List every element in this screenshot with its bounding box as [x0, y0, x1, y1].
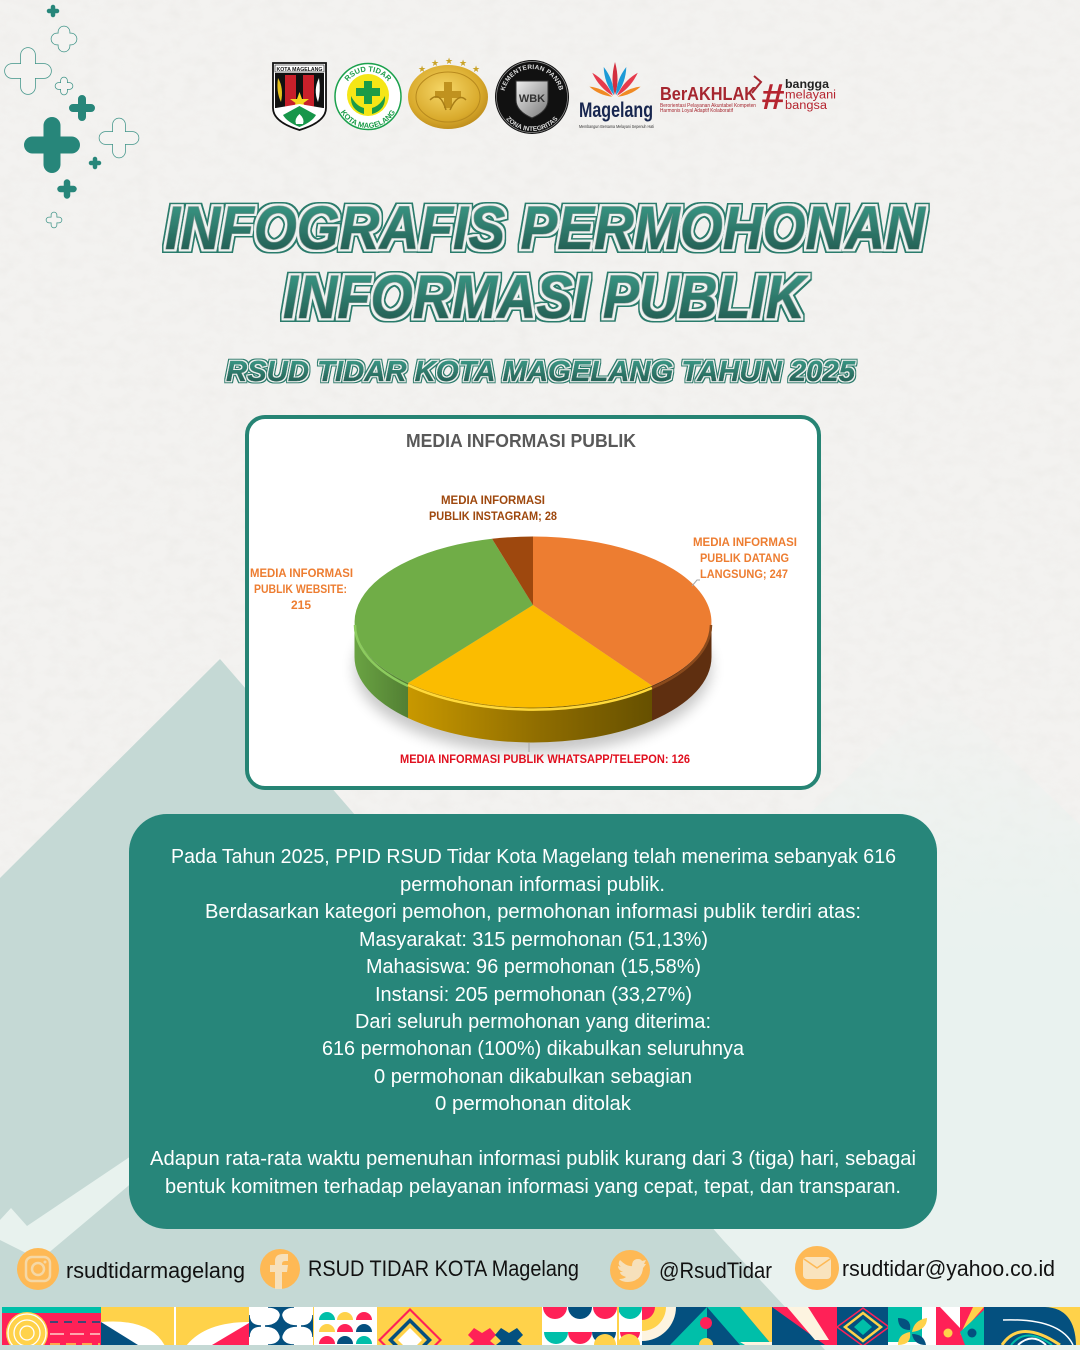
logo: BerAKHLAK: Berorientasi Pelayanan Akuntabel Kompeten [660, 103, 756, 109]
decorative batik strip [2, 1307, 1080, 1345]
summary paragraph: Dari seluruh permohonan yang diterima: [355, 1010, 711, 1033]
label: website [250, 568, 353, 612]
logo: BerAKHLAK [660, 76, 761, 114]
tile 12 [936, 1307, 984, 1345]
icon: facebook [260, 1249, 300, 1289]
footer contacts [17, 1246, 1055, 1290]
label: datang langsung: LANGSUNG; 247 [700, 569, 788, 581]
label: website: PUBLIK WEBSITE: [254, 584, 347, 596]
tile 13 [984, 1307, 1080, 1345]
logo: BerAKHLAK: Harmonis Loyal Adaptif Kolaboratif [660, 108, 734, 114]
title: INFORMASI PUBLIK [283, 263, 809, 331]
logo: WBK zona integritas: KEMENTERIAN PANRB [500, 64, 564, 91]
label: website: MEDIA INFORMASI [250, 568, 353, 580]
logo: bangga melayani bangsa: # [761, 76, 784, 117]
summary paragraph: 0 permohonan dikabulkan sebagian [374, 1065, 692, 1088]
subtitle: RSUD TIDAR KOTA MAGELANG TAHUN 2025 [226, 356, 856, 388]
logo: gold medal: ★ [445, 56, 453, 66]
tile 10 [837, 1307, 888, 1345]
title: INFOGRAFIS PERMOHONAN [165, 194, 927, 262]
logo: gold medal: ★ [431, 58, 439, 68]
logo: bangga melayani bangsa: melayani [785, 90, 836, 102]
background: pale mountain [560, 690, 1080, 1350]
tile 8 [642, 1307, 772, 1345]
logo: Kota Magelang brand: Magelang [579, 99, 653, 122]
logo row [272, 56, 836, 134]
facebook name: RSUD TIDAR KOTA Magelang [308, 1256, 579, 1281]
summary paragraph: Masyarakat: 315 permohonan (51,13%) [359, 928, 708, 951]
twitter handle: @RsudTidar [659, 1258, 772, 1283]
summary paragraph: Berdasarkan kategori pemohon, permohonan informasi publik terdiri atas: [205, 900, 861, 923]
logo: WBK zona integritas: ZONA INTEGRITAS [506, 116, 558, 131]
panel: pie chart [247, 417, 819, 788]
tile 11 [888, 1307, 922, 1342]
panel: summary text [129, 814, 937, 1229]
logo: gold medal: ★ [472, 64, 480, 74]
summary paragraph [150, 845, 916, 1198]
label: Instagram: MEDIA INFORMASI [441, 495, 545, 507]
label: datang langsung [693, 537, 797, 581]
title [165, 194, 927, 331]
logo: bangga melayani bangsa: bangga [785, 79, 830, 91]
label: website: 215 [291, 600, 312, 612]
tile 1 [2, 1307, 101, 1313]
icon group: decorative plus signs [12, 7, 132, 225]
logo: Kota Magelang brand: Membangun Bersama Melayani Sepenuh Hati [579, 124, 654, 129]
icon: twitter [610, 1250, 650, 1290]
instagram handle: rsudtidarmagelang [66, 1258, 245, 1283]
summary paragraph: Adapun rata-rata waktu pemenuhan informasi publik kurang dari 3 (tiga) hari, sebagai [150, 1147, 916, 1170]
logo: WBK zona integritas: WBK [519, 93, 545, 105]
chart title: MEDIA INFORMASI PUBLIK [406, 431, 636, 451]
logo: RSUD Tidar: KOTA MAGELANG [340, 110, 395, 128]
3D pie chart [354, 536, 712, 753]
tile 2 [101, 1322, 165, 1346]
label: datang langsung: PUBLIK DATANG [700, 553, 789, 565]
logo: BerAKHLAK: BerAKHLAK [660, 83, 757, 104]
logo: gold medal: ★ [418, 64, 426, 74]
label: Instagram [429, 495, 558, 523]
tile 4 [249, 1307, 313, 1345]
logo: bangga melayani bangsa [761, 76, 836, 117]
summary paragraph: Instansi: 205 permohonan (33,27%) [375, 983, 692, 1006]
label: datang langsung: MEDIA INFORMASI [693, 537, 797, 549]
summary paragraph: 616 permohonan (100%) dikabulkan seluruhnya [322, 1037, 745, 1060]
logo: Kota Magelang crest: KOTA MAGELANG [276, 67, 322, 73]
label: whatsapp: MEDIA INFORMASI PUBLIK WHATSAPP/TELEPON: 126 [400, 754, 690, 766]
logo: WBK zona integritas [495, 60, 569, 134]
summary paragraph: 0 permohonan ditolak [435, 1092, 632, 1115]
logo: Kota Magelang crest [273, 63, 326, 130]
logo: RSUD Tidar: RSUD TIDAR [344, 66, 392, 82]
label: Instagram: PUBLIK INSTAGRAM; 28 [429, 511, 558, 523]
summary paragraph: Pada Tahun 2025, PPID RSUD Tidar Kota Magelang telah menerima sebanyak 616 [171, 845, 896, 868]
logo: bangga melayani bangsa: bangsa [785, 100, 828, 112]
email address: rsudtidar@yahoo.co.id [842, 1256, 1055, 1281]
icon: email [795, 1246, 839, 1290]
summary paragraph: bentuk komitmen terhadap pelayanan informasi yang cepat, tepat, dan transparan. [165, 1175, 901, 1198]
tile 5 [314, 1307, 377, 1345]
tile 3 [186, 1322, 249, 1346]
background: sage mountain [0, 659, 825, 1350]
logo: Kota Magelang brand [579, 62, 654, 129]
logo: RSUD Tidar [334, 62, 402, 130]
tile 6 [378, 1308, 442, 1345]
tile 9 [772, 1307, 837, 1345]
icon: instagram [17, 1248, 59, 1290]
logo: gold medal: ★ [459, 58, 467, 68]
summary paragraph: Mahasiswa: 96 permohonan (15,58%) [366, 955, 701, 978]
logo: gold medal [408, 56, 488, 129]
tile 7 [542, 1307, 642, 1345]
summary paragraph: permohonan informasi publik. [400, 873, 665, 896]
